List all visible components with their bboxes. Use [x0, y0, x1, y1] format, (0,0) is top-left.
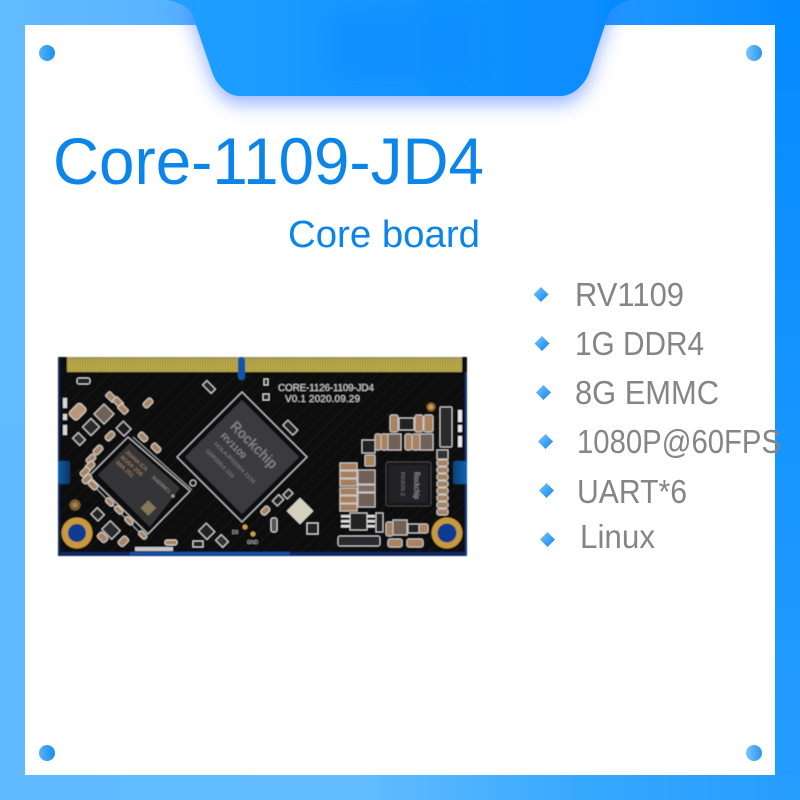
feature: 1080P@60FPS: 1080P@60FPS [577, 423, 781, 460]
feature: UART*6: UART*6 [577, 473, 687, 510]
gold edge connector [67, 357, 462, 380]
power management chip [386, 462, 431, 506]
mounting hole right [426, 402, 462, 548]
top tab [168, 0, 630, 96]
feature list [534, 276, 781, 555]
test pads: GND [247, 540, 258, 546]
silkscreen label [278, 383, 374, 405]
ram chip: B8A 251 [114, 460, 135, 479]
ram chip [88, 437, 196, 537]
pcb base [58, 357, 467, 556]
test pads [232, 524, 258, 546]
subtitle: Core board [288, 214, 480, 256]
small components centre [260, 379, 318, 534]
cpu chip: Rockchip RV1109: G0R20S4 103 [204, 449, 235, 480]
cpu chip: Rockchip RV1109: HOLAJP00304 2134 [212, 441, 256, 485]
power management chip: RK809-2 [399, 472, 405, 496]
feature: 8G EMMC: 8G EMMC [575, 374, 719, 411]
power management chip: Rockchip [412, 472, 422, 499]
feature: RV1109: RV1109 [575, 276, 684, 313]
ram chip: 8G64 256 [119, 455, 144, 478]
core board photo [58, 357, 467, 556]
feature: 1G DDR4: 1G DDR4 [575, 325, 704, 362]
feature: RV1109 [534, 276, 684, 313]
feature: Linux: Linux [580, 518, 655, 555]
cpu chip: Rockchip RV1109: RV1109 [219, 431, 249, 461]
silkscreen label: CORE-1126-1109-JD4 [278, 383, 374, 394]
ram chip: JNANA ICA [124, 450, 149, 473]
feature: Linux [540, 518, 655, 555]
small components right [338, 407, 462, 547]
silkscreen label: V0.1 2020.09.29 [285, 394, 360, 405]
cpu chip: Rockchip RV1109: Rockchip [226, 418, 281, 473]
title: Core-1109-JD4 [53, 124, 484, 198]
cpu chip: Rockchip RV1109 [177, 392, 307, 522]
ram chip: JNAEMMC1 [150, 474, 172, 495]
small components left [63, 378, 228, 551]
mounting hole left [62, 500, 92, 548]
test pads: D0 [232, 530, 239, 536]
feature: UART*6 [539, 473, 687, 510]
